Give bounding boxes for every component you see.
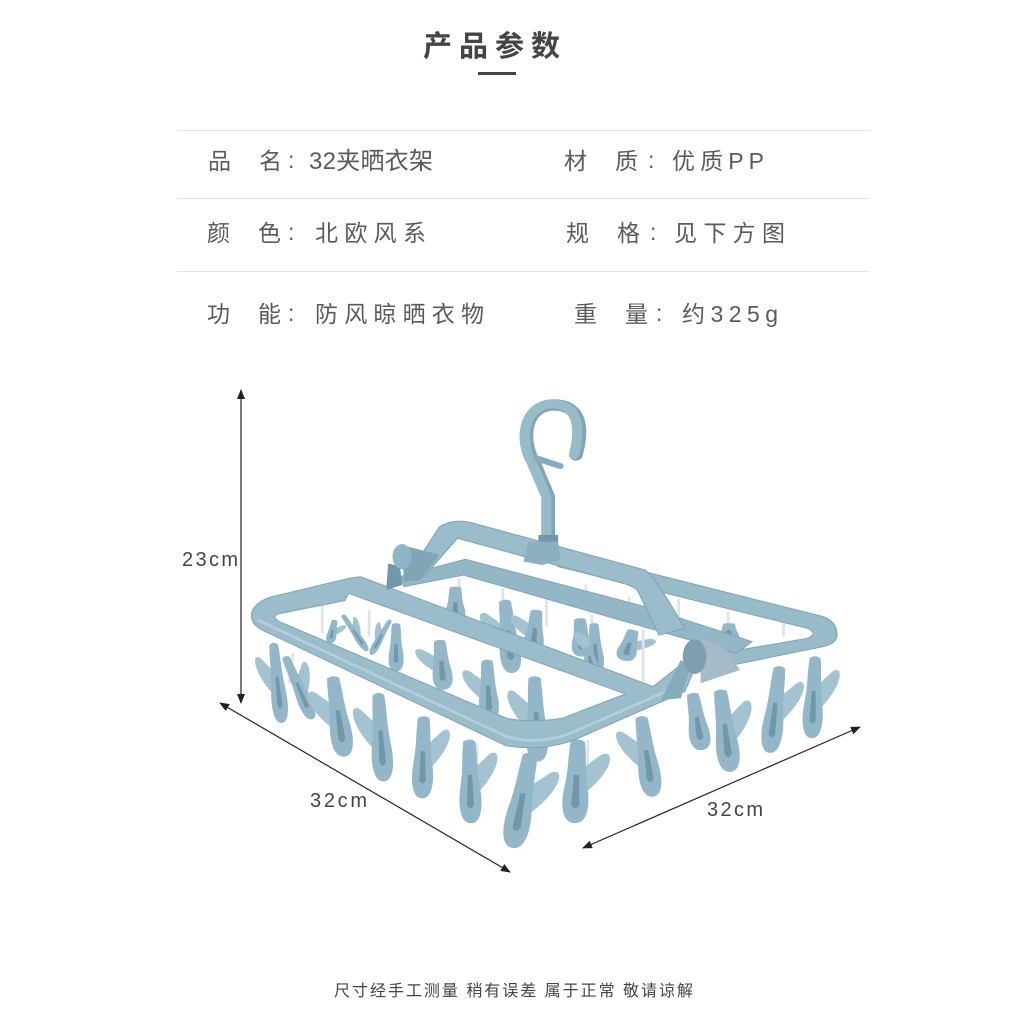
row 1: name and material (208, 147, 764, 175)
dimension arrow: height: 23cm (182, 549, 238, 571)
swivel hook (525, 404, 580, 538)
row 3: function and weight: 防风晾晒衣物 (315, 301, 484, 327)
row 1: name and material: : (288, 147, 294, 173)
hook hub (523, 535, 560, 565)
row 3: function and weight: : (288, 300, 294, 326)
left hinge (386, 544, 440, 590)
dimension arrow: depth: 32cm (310, 790, 367, 812)
right hinge (661, 638, 740, 700)
row 2: colour and size: 色 (258, 220, 281, 246)
row 2: colour and size (207, 219, 785, 246)
row 1: name and material: 材 (564, 148, 587, 174)
back frame (400, 550, 837, 667)
product: clothes hanger with clips (252, 404, 840, 852)
row 2: colour and size: : (288, 219, 294, 245)
dimension arrow: width (583, 727, 860, 848)
front clips (253, 600, 840, 852)
row 1: name and material: 32夹晒衣架 (309, 148, 433, 175)
dimension arrow: width: 32cm (707, 799, 763, 821)
footer note: 尺寸经手工测量 稍有误差 属于正常 敬请谅解 (334, 982, 693, 1000)
parameter table (177, 130, 870, 327)
row 1: name and material: 优质PP (672, 148, 764, 174)
row 3: function and weight: 量 (625, 301, 648, 327)
row 1: name and material: : (648, 147, 654, 173)
row 2: colour and size: 格 (617, 220, 640, 246)
row 1: name and material: 名 (259, 148, 282, 174)
hanger arm (406, 521, 685, 635)
row 2: colour and size: 北欧风系 (315, 220, 426, 246)
row 3: function and weight (207, 300, 778, 327)
row 2: colour and size: 见下方图 (674, 220, 785, 246)
title: 产品参数 (423, 30, 560, 63)
row 3: function and weight: 约325g (682, 301, 778, 327)
row 3: function and weight: 能 (258, 301, 281, 327)
row 3: function and weight: 功 (207, 301, 230, 327)
row 2: colour and size: : (650, 219, 656, 245)
row 1: name and material: 质 (615, 148, 638, 174)
row 2: colour and size: 规 (566, 220, 589, 246)
dimension arrow: depth (220, 703, 510, 872)
row 3: function and weight: 重 (574, 301, 597, 327)
row 3: function and weight: : (656, 300, 662, 326)
row 1: name and material: 品 (208, 148, 231, 174)
row 2: colour and size: 颜 (207, 220, 230, 246)
front frame (252, 577, 693, 748)
back clips (325, 578, 784, 675)
